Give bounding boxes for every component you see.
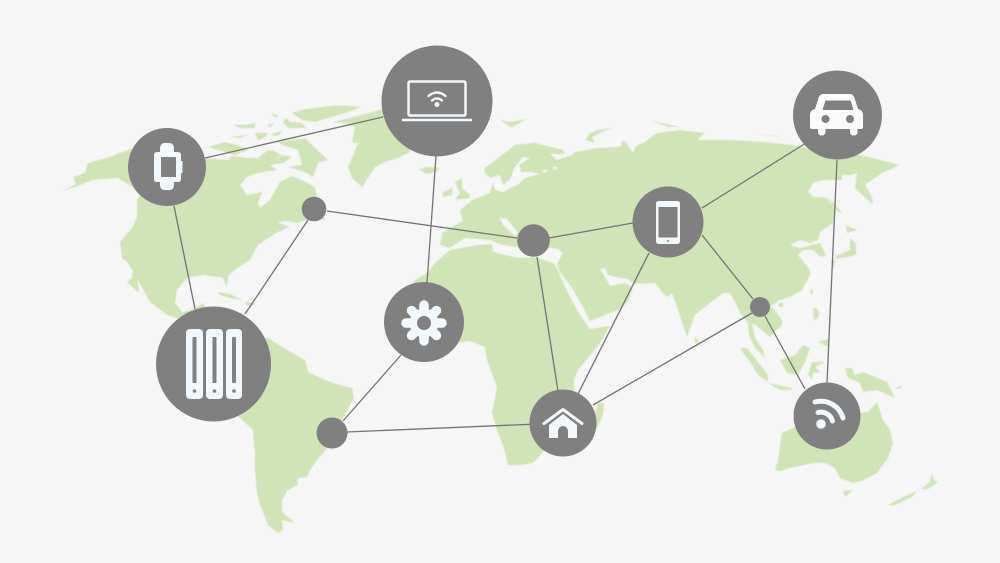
- map: New Guinea: [845, 368, 895, 398]
- map: Novaya Zemlya: [585, 128, 612, 143]
- connection lines: [174, 117, 837, 432]
- icon: laptop with wifi: [402, 82, 472, 120]
- node: small Brazil: [316, 418, 348, 448]
- icon: smartwatch: [154, 143, 182, 190]
- map: Hainan: [778, 302, 783, 307]
- node: small Southeast Asia: [750, 297, 770, 317]
- map: Svalbard: [500, 119, 527, 127]
- map: Japan: [832, 225, 857, 268]
- icon: server racks: [186, 329, 242, 399]
- map: Adriatic Sea cutout: [500, 218, 518, 236]
- map: Philippines: [813, 307, 830, 347]
- node: small Mediterranean: [517, 224, 550, 257]
- node: server: [156, 306, 271, 422]
- map: Sri Lanka: [695, 336, 699, 344]
- node: home: [530, 390, 596, 456]
- node: wifi: [794, 382, 860, 450]
- icon: smartphone: [656, 201, 680, 244]
- map: United Kingdom: [455, 178, 470, 200]
- icon: gear: [406, 305, 442, 341]
- world map: [62, 105, 938, 533]
- map: Sakhalin: [828, 198, 843, 215]
- node: small Canada: [302, 197, 326, 221]
- node: gear: [384, 282, 464, 362]
- map: Sumatra: [740, 348, 768, 382]
- icon: house: [544, 410, 582, 438]
- node: smartwatch: [128, 128, 206, 206]
- map: Taiwan: [810, 288, 813, 295]
- map: Baltic lakes cutout: [542, 167, 557, 172]
- node: laptop: [382, 46, 492, 156]
- node: car: [793, 70, 882, 160]
- node: smartphone: [632, 186, 704, 258]
- map: Java: [768, 383, 792, 390]
- map: Ireland: [443, 188, 453, 197]
- map: Africa: [395, 244, 610, 465]
- map: Greenland: [332, 108, 412, 187]
- map: Tasmania: [843, 490, 853, 497]
- map: Arctic islands: [208, 105, 362, 177]
- map: Eurasia: [440, 130, 900, 358]
- map: Caribbean islands: [217, 292, 242, 300]
- map: Madagascar: [590, 403, 604, 430]
- map: Australia: [775, 402, 893, 483]
- icon: wifi signal: [815, 401, 843, 429]
- map: Iceland: [419, 167, 440, 174]
- map: Sulawesi: [808, 362, 825, 380]
- map: South America: [220, 338, 354, 533]
- map: North America: [62, 140, 325, 360]
- map: Borneo: [780, 345, 810, 375]
- map: New Zealand: [888, 473, 938, 505]
- map: Baja California: [127, 268, 139, 293]
- icon: car: [810, 94, 863, 136]
